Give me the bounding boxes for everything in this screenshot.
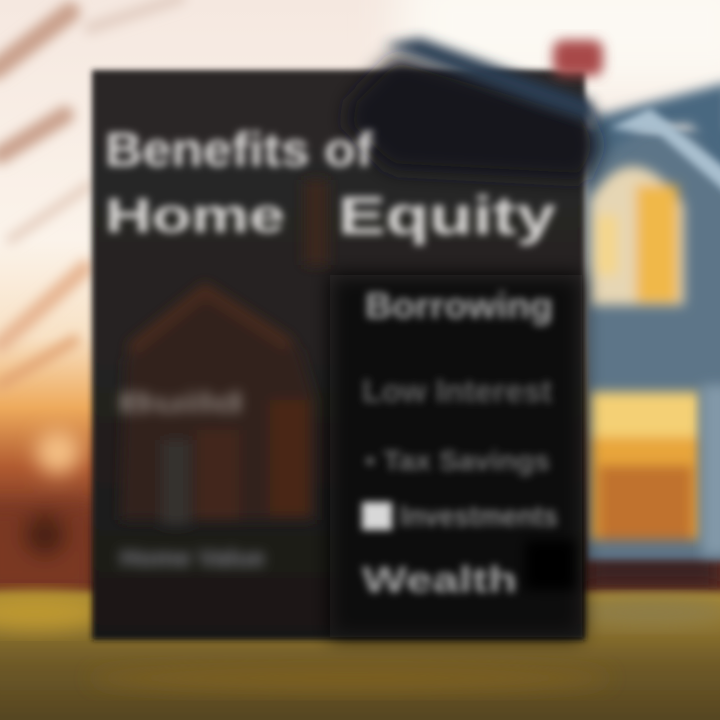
benefit 5: Wealth bbox=[362, 559, 517, 600]
benefit 2: Low Interest bbox=[362, 373, 552, 409]
panel right column shade bbox=[330, 275, 582, 637]
background: lawn bbox=[0, 592, 720, 720]
illustration: house in panel bbox=[120, 180, 328, 525]
caption under house: Home Value bbox=[120, 545, 265, 572]
label on house: Build bbox=[118, 387, 243, 418]
title: Equity bbox=[338, 186, 556, 246]
background: bare branches bbox=[0, 0, 180, 385]
upper window bbox=[590, 166, 684, 305]
benefit 3: • Tax Savings bbox=[365, 445, 550, 476]
benefits list: Investments bbox=[400, 500, 558, 533]
background house bbox=[585, 82, 720, 560]
benefits list bbox=[362, 285, 558, 600]
benefit 1: Borrowing bbox=[365, 285, 553, 326]
title: Home bbox=[105, 190, 285, 243]
background: treeline bbox=[0, 430, 720, 595]
icon: chimney bbox=[553, 40, 603, 76]
title: Benefits of bbox=[105, 124, 374, 177]
lower window bbox=[590, 392, 700, 540]
title bbox=[105, 124, 556, 246]
house wall bbox=[585, 130, 720, 560]
panel: dark infographic card bbox=[92, 38, 603, 640]
benefit 4 bbox=[362, 502, 392, 530]
house roof bbox=[590, 82, 720, 190]
panel roof overlay bbox=[345, 55, 600, 180]
